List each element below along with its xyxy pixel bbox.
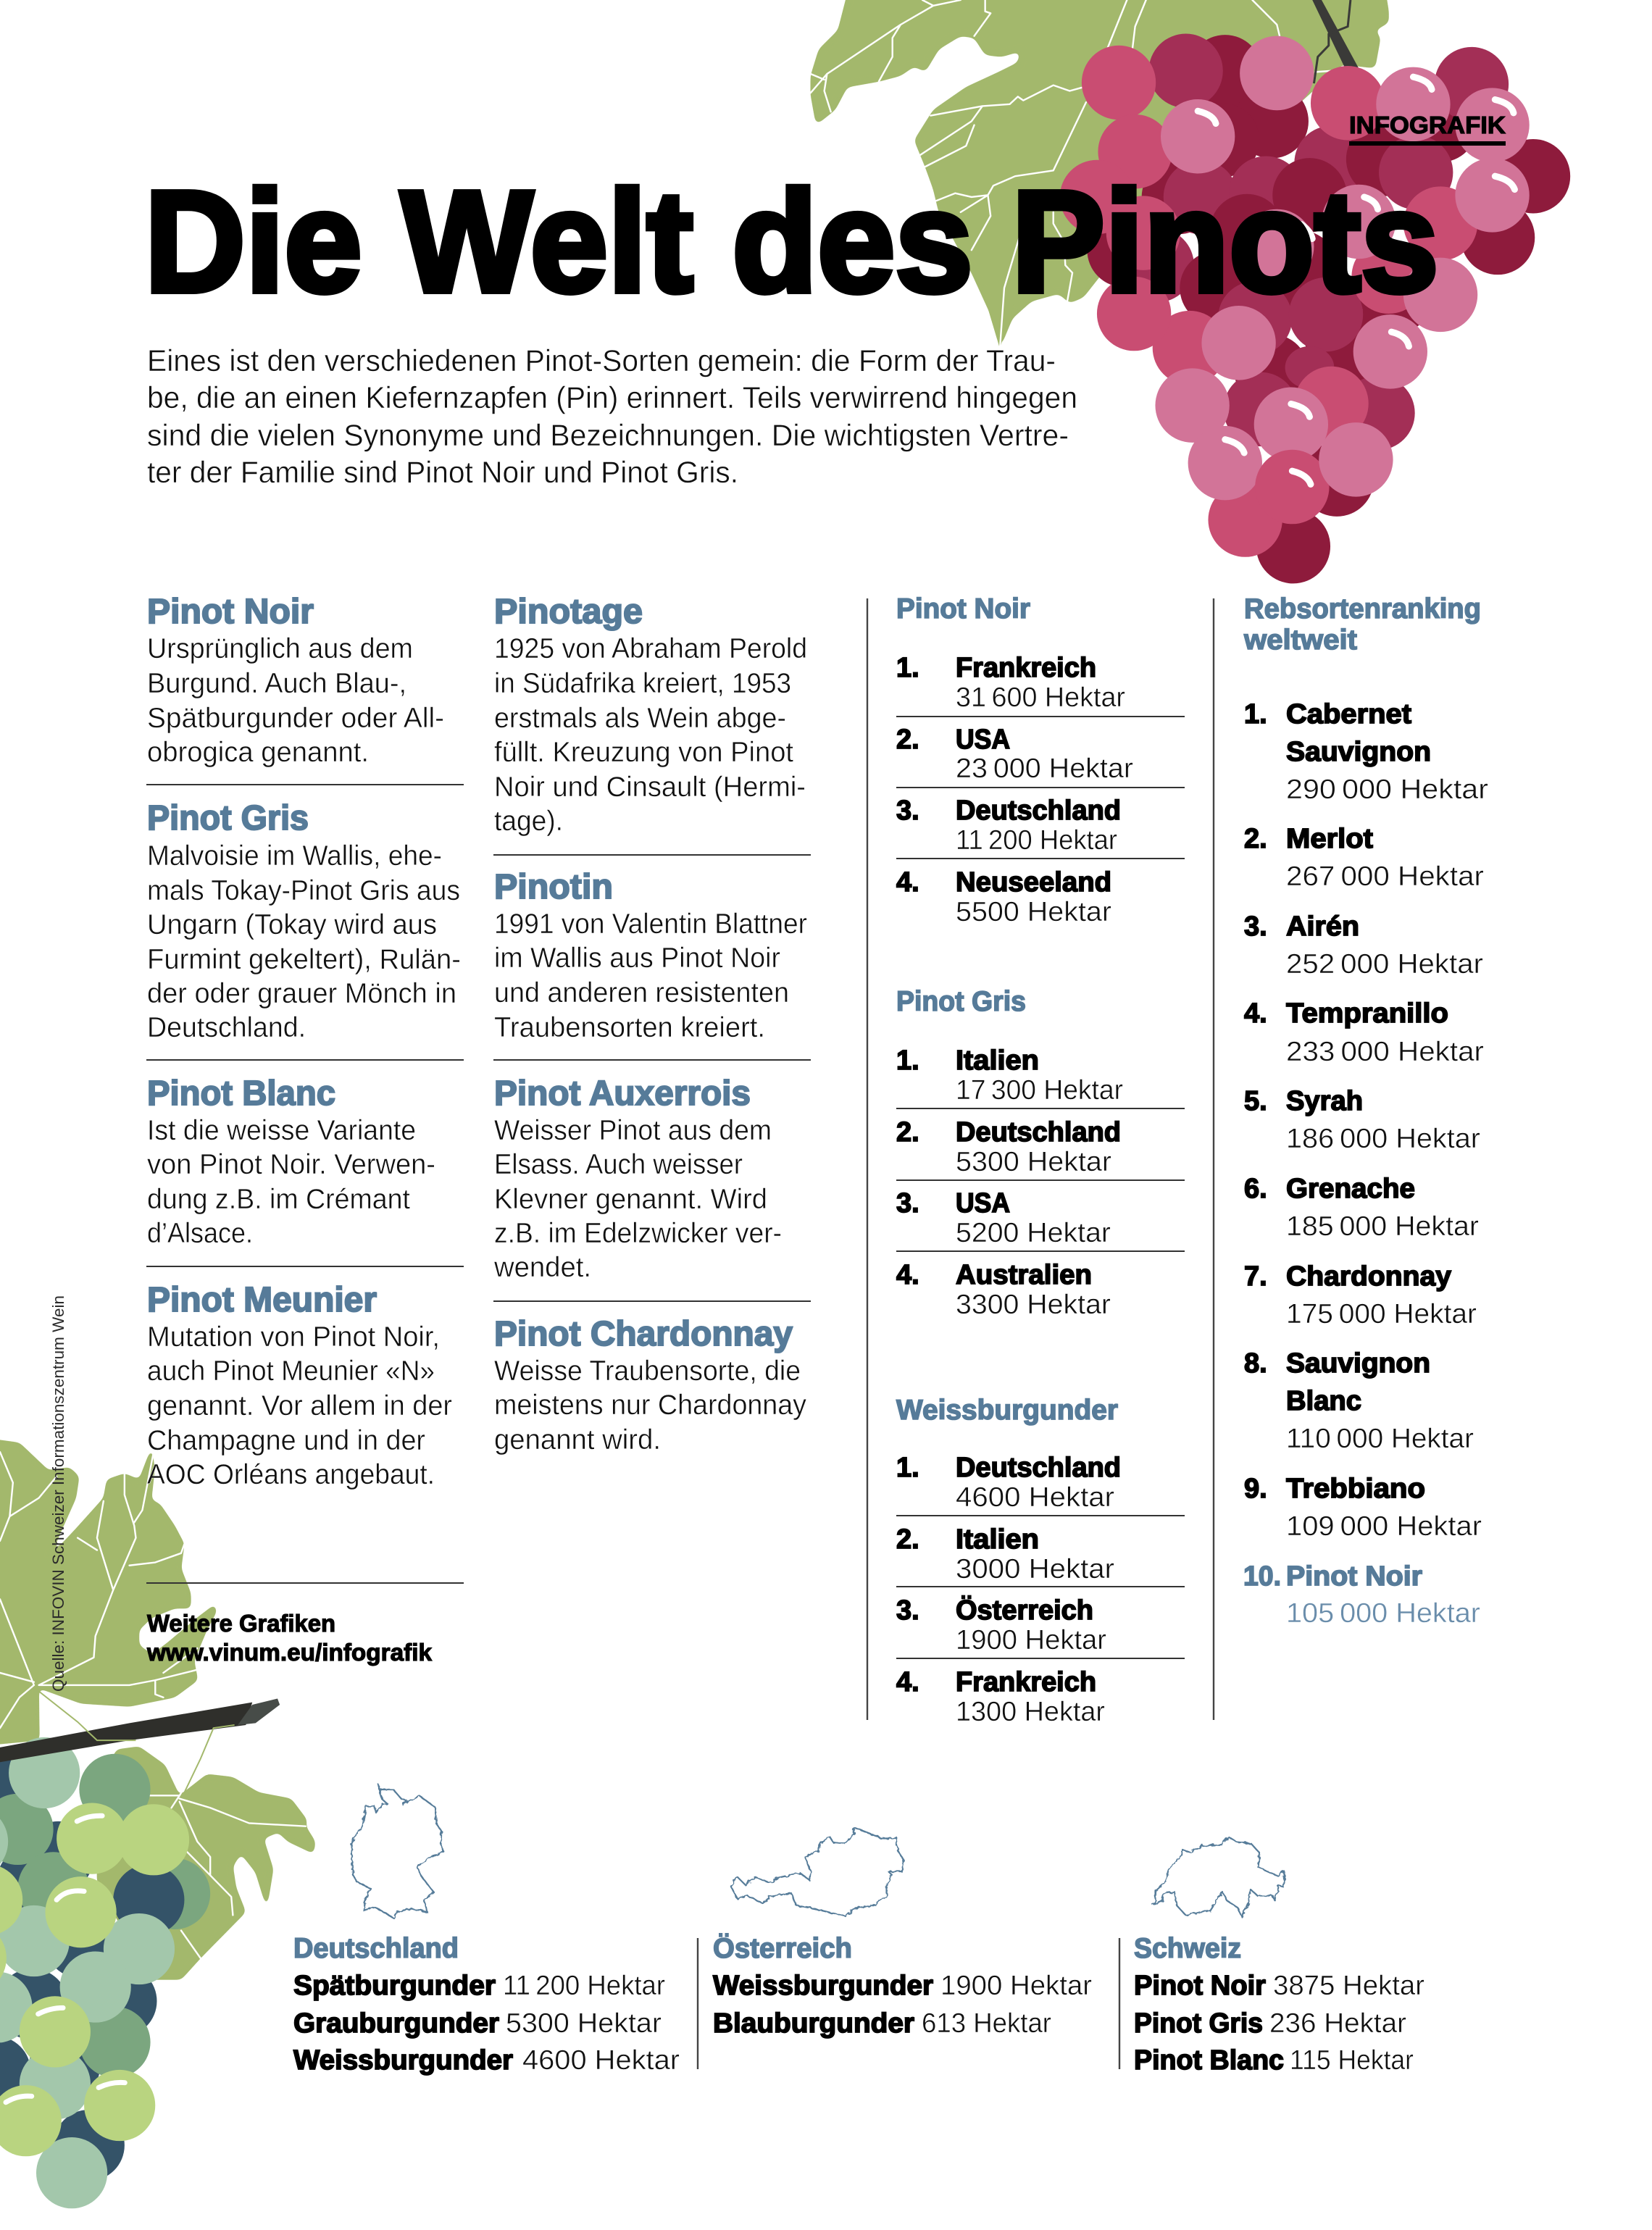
- infografik label: INFOGRAFIK: [1349, 112, 1506, 138]
- entry: Pinot Blanc: Pinot Blanc: [147, 1074, 335, 1113]
- intro text: sind die vielen Synonyme und Bezeichnungen. Die wichtigsten Vertre-: [147, 418, 1069, 452]
- ranking: Weissburgunder: 3000 Hektar: [956, 1554, 1114, 1584]
- ranking: Pinot Gris: 1.: [896, 1045, 919, 1076]
- ranking list: 5.: [1244, 1086, 1267, 1116]
- entry: Pinotage: Pinotage: [494, 593, 643, 631]
- entry: Pinot Auxerrois: wendet.: [493, 1252, 591, 1283]
- ranking: Pinot Noir: 5500 Hektar: [956, 897, 1111, 927]
- grapes: [1060, 34, 1570, 583]
- ranking: Pinot Gris: 4.: [896, 1260, 919, 1290]
- ranking: Pinot Noir: Frankreich: [956, 653, 1096, 683]
- ranking list: Grenache: [1286, 1174, 1415, 1204]
- ranking list: 186 000 Hektar: [1286, 1124, 1480, 1154]
- ranking list: 252 000 Hektar: [1286, 949, 1483, 980]
- entry: Pinot Gris: Furmint gekeltert), Rulän-: [147, 944, 461, 975]
- ranking: Pinot Gris: Deutschland: [956, 1117, 1121, 1148]
- ranking: Pinot Noir: Deutschland: [956, 795, 1121, 826]
- ranking list: 110 000 Hektar: [1286, 1424, 1474, 1454]
- ranking list: 105 000 Hektar: [1286, 1598, 1480, 1629]
- ranking list: 6.: [1244, 1174, 1267, 1204]
- entry: Pinotin: [494, 868, 807, 1043]
- entry: Pinot Auxerrois: Weisser Pinot aus dem: [494, 1115, 772, 1146]
- grapes: [0, 1737, 210, 2208]
- ranking list: Airén: [1286, 911, 1359, 942]
- ranking: Pinot Noir: 2.: [896, 724, 919, 755]
- title: Die Welt des Pinots: [145, 162, 1439, 322]
- entry: Pinot Auxerrois: [493, 1074, 782, 1283]
- text column 1: pinot varieties: [146, 593, 464, 1666]
- upper leaf veins: [0, 1452, 197, 1728]
- ranking: Pinot Noir: 31 600 Hektar: [956, 682, 1125, 713]
- ranking heading: weltweit: [1243, 625, 1357, 656]
- entry: Pinot Blanc: von Pinot Noir. Verwen-: [147, 1149, 435, 1180]
- country summary: Germany: [293, 1933, 680, 2076]
- ranking list: 267 000 Hektar: [1286, 861, 1484, 892]
- entry: Pinot Noir: [147, 593, 444, 768]
- upper vine leaf: [0, 1437, 217, 1747]
- ranking list: Cabernet: [1286, 699, 1411, 730]
- intro text: ter der Familie sind Pinot Noir und Pinot Gris.: [147, 455, 738, 489]
- ranking: Pinot Gris: 3300 Hektar: [956, 1290, 1111, 1320]
- country summary: Austria: [713, 1933, 1092, 2039]
- country summary: Germany: Deutschland: [293, 1933, 459, 1964]
- entry: Pinot Meunier: AOC Orléans angebaut.: [147, 1459, 435, 1490]
- ranking: Weissburgunder: 1900 Hektar: [956, 1625, 1106, 1655]
- entry: Pinot Chardonnay: [494, 1315, 806, 1456]
- grape highlights: [6, 1816, 125, 2102]
- leaf veins: [811, 0, 1343, 348]
- ranking: Weissburgunder: 1.: [896, 1453, 919, 1483]
- country summary: Germany: Weissburgunder: [293, 2045, 513, 2076]
- more graphics link: www.vinum.eu/infografik: [146, 1639, 433, 1666]
- entry: Pinotage: [494, 593, 807, 837]
- country summary: Germany: Grauburgunder: [293, 2008, 499, 2039]
- ranking list: 7.: [1244, 1261, 1267, 1292]
- country summary: Switzerland: [1134, 1933, 1424, 2076]
- entry: Pinotage: 1925 von Abraham Perold: [494, 633, 807, 664]
- country summary: Austria: Österreich: [713, 1933, 852, 1964]
- ranking list: 290 000 Hektar: [1286, 774, 1488, 805]
- entry: Pinotage: erstmals als Wein abge-: [494, 703, 786, 734]
- ranking: Weissburgunder: Frankreich: [956, 1667, 1096, 1697]
- ranking: Pinot Gris: [896, 986, 1185, 1320]
- entry: Pinotin: 1991 von Valentin Blattner: [494, 909, 807, 940]
- entry: Pinot Noir: Pinot Noir: [147, 593, 314, 631]
- ranking list: Sauvignon: [1286, 737, 1431, 767]
- ranking: Pinot Noir: USA: [956, 724, 1010, 755]
- intro text: Eines ist den verschiedenen Pinot-Sorten gemein: die Form der Trau-: [147, 343, 1056, 377]
- ranking: Pinot Noir: 1.: [896, 653, 919, 683]
- lower leaf veins: [149, 1771, 306, 1958]
- entry: Pinot Meunier: Champagne und in der: [147, 1425, 425, 1456]
- entry: Pinot Gris: der oder grauer Mönch in: [147, 978, 456, 1009]
- entry: Pinotage: füllt. Kreuzung von Pinot: [494, 737, 793, 768]
- ranking: Pinot Noir: 3.: [896, 795, 919, 826]
- ranking list: Trebbiano: [1286, 1474, 1425, 1504]
- country summary: Switzerland: Pinot Gris: [1134, 2008, 1263, 2039]
- entry: Pinot Noir: Ursprünglich aus dem: [147, 633, 413, 664]
- ranking column: countries per variety: [896, 593, 1185, 1727]
- entry: Pinotage: tage).: [494, 806, 563, 837]
- ranking column: worldwide grape varieties: [1243, 593, 1488, 1629]
- text column 2: pinot crossings: [493, 593, 811, 1456]
- entry: Pinotin: Pinotin: [494, 868, 613, 906]
- country summary: Germany: 5300 Hektar: [506, 2008, 662, 2039]
- ranking: Pinot Gris: USA: [956, 1188, 1010, 1219]
- ranking: Pinot Noir: 23 000 Hektar: [956, 753, 1133, 784]
- ranking list: 1.: [1244, 699, 1267, 730]
- branch: [0, 1691, 280, 1792]
- ranking list: 175 000 Hektar: [1286, 1299, 1477, 1329]
- ranking list: 185 000 Hektar: [1286, 1211, 1479, 1242]
- ranking list: 233 000 Hektar: [1286, 1037, 1484, 1067]
- ranking list: 4.: [1244, 998, 1267, 1029]
- ranking list: 10.: [1243, 1561, 1281, 1592]
- entry: Pinotin: im Wallis aus Pinot Noir: [494, 943, 780, 974]
- country summary: Germany: 11 200 Hektar: [503, 1971, 665, 2001]
- entry: Pinot Meunier: Mutation von Pinot Noir,: [147, 1321, 440, 1353]
- country summary: Austria: Weissburgunder: [713, 1971, 933, 2001]
- ranking: Pinot Gris: Italien: [956, 1045, 1039, 1076]
- ranking: Weissburgunder: 4600 Hektar: [956, 1482, 1114, 1513]
- ranking list: 9.: [1244, 1474, 1267, 1504]
- ranking: Weissburgunder: 1300 Hektar: [956, 1697, 1105, 1727]
- entry: Pinotin: und anderen resistenten: [494, 977, 789, 1008]
- country summary: Switzerland: 3875 Hektar: [1273, 1971, 1424, 2001]
- ranking: Pinot Gris: 3.: [896, 1188, 919, 1219]
- entry: Pinot Meunier: genannt. Vor allem in der: [147, 1390, 452, 1421]
- entry: Pinot Gris: Pinot Gris: [147, 799, 309, 838]
- map: Austria outline: [731, 1828, 904, 1916]
- more graphics link: [146, 1610, 433, 1666]
- ranking list: 2.: [1244, 824, 1267, 854]
- entry: Pinot Meunier: auch Pinot Meunier «N»: [147, 1356, 435, 1387]
- entry: Pinot Chardonnay: meistens nur Chardonnay: [494, 1390, 806, 1421]
- country summary: Austria: 1900 Hektar: [940, 1971, 1092, 2001]
- entry: Pinot Auxerrois: Pinot Auxerrois: [494, 1074, 751, 1113]
- entry: Pinot Gris: Ungarn (Tokay wird aus: [147, 909, 437, 940]
- ranking: Weissburgunder: 2.: [896, 1524, 919, 1555]
- vine leaf: [811, 0, 1389, 348]
- entry: Pinot Noir: obrogica genannt.: [147, 737, 369, 768]
- ranking list: 3.: [1244, 911, 1267, 942]
- country summary: Switzerland: Pinot Blanc: [1134, 2045, 1284, 2076]
- country summary: Austria: Blauburgunder: [713, 2008, 914, 2039]
- ranking: Weissburgunder: Weissburgunder: [896, 1395, 1118, 1426]
- lower vine leaf: [97, 1747, 315, 1979]
- ranking list: Tempranillo: [1286, 998, 1448, 1029]
- entry: Pinot Auxerrois: Elsass. Auch weisser: [494, 1149, 743, 1180]
- entry: Pinot Gris: Deutschland.: [147, 1012, 306, 1043]
- entry: Pinot Auxerrois: Klevner genannt. Wird: [494, 1184, 767, 1215]
- country summary: Switzerland: Schweiz: [1134, 1933, 1241, 1964]
- ranking: Weissburgunder: [896, 1395, 1185, 1727]
- entry: Pinotage: in Südafrika kreiert, 1953: [494, 668, 791, 699]
- ranking heading: Rebsortenranking: [1244, 593, 1481, 625]
- entry: Pinot Gris: Malvoisie im Wallis, ehe-: [147, 840, 442, 872]
- illustration: green grape bunch with leaves and branch: [0, 1437, 315, 2208]
- entry: Pinot Gris: mals Tokay-Pinot Gris aus: [147, 875, 460, 906]
- ranking: Pinot Noir: Neuseeland: [956, 867, 1111, 898]
- ranking: Pinot Noir: Pinot Noir: [896, 593, 1030, 625]
- ranking list: 109 000 Hektar: [1286, 1511, 1482, 1542]
- map: Switzerland outline: [1153, 1837, 1284, 1917]
- ranking: Pinot Gris: Pinot Gris: [896, 986, 1026, 1017]
- entry: Pinot Blanc: Ist die weisse Variante: [147, 1115, 416, 1146]
- country summary: Switzerland: 236 Hektar: [1269, 2008, 1406, 2039]
- ranking: Weissburgunder: Deutschland: [956, 1453, 1121, 1483]
- entry: Pinot Blanc: d’Alsace.: [147, 1218, 253, 1249]
- entry: Pinot Blanc: dung z.B. im Crémant: [147, 1184, 410, 1215]
- source note: Quelle: INFOVIN Schweizer Informationszentrum Wein: [49, 1295, 67, 1692]
- entry: Pinot Chardonnay: genannt wird.: [494, 1424, 661, 1456]
- ranking: Pinot Noir: 4.: [896, 867, 919, 898]
- ranking: Weissburgunder: 4.: [896, 1667, 919, 1697]
- entry: Pinot Meunier: Pinot Meunier: [147, 1281, 377, 1319]
- ranking: Weissburgunder: Österreich: [956, 1595, 1093, 1626]
- entry: Pinot Chardonnay: Pinot Chardonnay: [494, 1315, 793, 1353]
- ranking: Pinot Noir: 11 200 Hektar: [956, 825, 1117, 856]
- ranking: Weissburgunder: 3.: [896, 1595, 919, 1626]
- ranking list: Sauvignon: [1286, 1348, 1430, 1379]
- entry: Pinotage: Noir und Cinsault (Hermi-: [494, 772, 806, 803]
- ranking: Pinot Gris: 5300 Hektar: [956, 1147, 1111, 1177]
- ranking: Pinot Noir: [896, 593, 1185, 927]
- country summary: Switzerland: 115 Hektar: [1290, 2045, 1414, 2076]
- ranking: Pinot Gris: 17 300 Hektar: [956, 1075, 1123, 1106]
- country summary: Germany: Spätburgunder: [293, 1971, 496, 2001]
- ranking list: Blanc: [1286, 1386, 1361, 1416]
- country summary: Austria: 613 Hektar: [922, 2008, 1051, 2039]
- ranking list: Merlot: [1286, 824, 1373, 854]
- ranking: Pinot Gris: 5200 Hektar: [956, 1218, 1111, 1248]
- map: Germany outline: [351, 1784, 443, 1918]
- entry: Pinot Chardonnay: Weisse Traubensorte, die: [494, 1356, 801, 1387]
- entry: Pinot Blanc: [147, 1074, 435, 1249]
- intro text: [147, 343, 1077, 489]
- entry: Pinot Noir: Spätburgunder oder All-: [147, 703, 444, 734]
- ranking list: Syrah: [1286, 1086, 1363, 1116]
- ranking heading: [1243, 593, 1481, 656]
- ranking: Weissburgunder: Italien: [956, 1524, 1039, 1555]
- entry: Pinot Gris: [147, 799, 461, 1043]
- ranking list: [1243, 699, 1488, 1629]
- ranking list: Pinot Noir: [1286, 1561, 1422, 1592]
- grape highlights: [1198, 77, 1514, 484]
- country summary: Switzerland: Pinot Noir: [1134, 1971, 1266, 2001]
- entry: Pinot Noir: Burgund. Auch Blau-,: [147, 668, 406, 699]
- entry: Pinot Auxerrois: z.B. im Edelzwicker ver-: [494, 1218, 782, 1249]
- ranking: Pinot Gris: 2.: [896, 1117, 919, 1148]
- stem and tendril: [1312, 0, 1359, 83]
- more graphics link: Weitere Grafiken: [147, 1610, 335, 1637]
- illustration: red grape bunch with leaf: [811, 0, 1570, 583]
- entry: Pinot Meunier: [147, 1281, 452, 1490]
- ranking list: Chardonnay: [1286, 1261, 1451, 1292]
- intro text: be, die an einen Kiefernzapfen (Pin) erinnert. Teils verwirrend hingegen: [147, 380, 1077, 414]
- ranking: Pinot Gris: Australien: [956, 1260, 1092, 1290]
- country summary: Germany: 4600 Hektar: [522, 2045, 680, 2076]
- ranking list: 8.: [1244, 1348, 1267, 1379]
- entry: Pinotin: Traubensorten kreiert.: [494, 1012, 765, 1043]
